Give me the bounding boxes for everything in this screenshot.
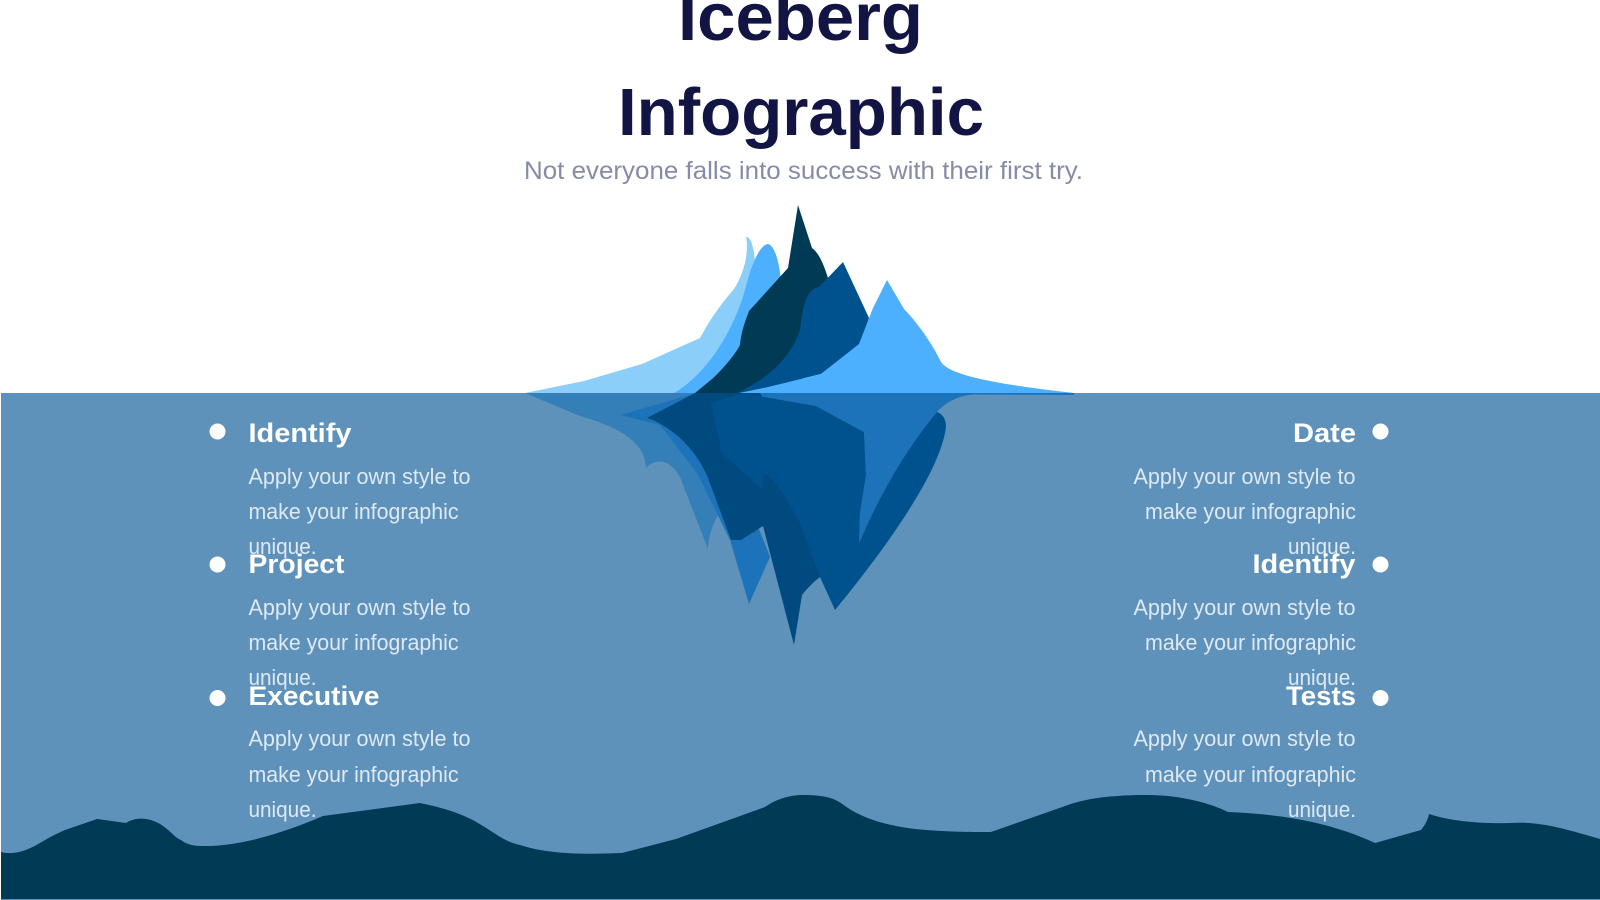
water panel — [1, 393, 1600, 900]
list item: Identify (right): Apply your own style to — [1134, 595, 1356, 620]
subtitle: Not everyone falls into success with their first try. — [524, 157, 1083, 185]
iceberg below water — [525, 393, 1074, 645]
list item: Date (right): Date — [1293, 418, 1356, 448]
list item: Identify (right): Identify — [1252, 549, 1356, 579]
list item: Project (left): Project — [248, 549, 344, 579]
list item: Date (right): unique. — [1288, 534, 1356, 559]
iceberg above water — [525, 205, 1074, 393]
list item: Date (right) — [1134, 418, 1388, 559]
list item: Tests (right): Apply your own style to — [1134, 726, 1356, 751]
list item: Project (left) — [210, 549, 470, 690]
list item: Executive (left): unique. — [248, 797, 316, 822]
list item: Identify (left): make your infographic — [248, 499, 458, 524]
list item: Date (right): make your infographic — [1145, 499, 1356, 524]
list item: Executive (left): Apply your own style to — [248, 726, 470, 751]
list item: Project (left): unique. — [248, 665, 316, 690]
list item: Identify (left): Apply your own style to — [248, 464, 470, 489]
list item: Identify (right) — [1134, 549, 1388, 690]
list item: Tests (right): make your infographic — [1145, 762, 1356, 787]
list item: Executive (left): Executive — [248, 681, 380, 711]
list item: Executive (left): make your infographic — [248, 762, 458, 787]
list item: Project (left): Apply your own style to — [248, 595, 470, 620]
list item: Executive (left) — [210, 681, 470, 822]
list item: Identify (left): Identify — [248, 418, 352, 448]
list item: Project (left): make your infographic — [248, 630, 458, 655]
list item: Identify (left): unique. — [248, 534, 316, 559]
list item: Date (right): Apply your own style to — [1134, 464, 1356, 489]
seabed silhouette — [1, 795, 1600, 899]
list item: Identify (right): unique. — [1288, 665, 1356, 690]
list item: Identify (right): make your infographic — [1145, 630, 1356, 655]
title — [618, 0, 984, 150]
list item: Tests (right): Tests — [1286, 681, 1356, 711]
title: Infographic — [618, 75, 984, 150]
list item: Identify (left) — [210, 418, 470, 559]
list item: Tests (right): unique. — [1288, 797, 1356, 822]
list item: Tests (right) — [1134, 681, 1388, 822]
